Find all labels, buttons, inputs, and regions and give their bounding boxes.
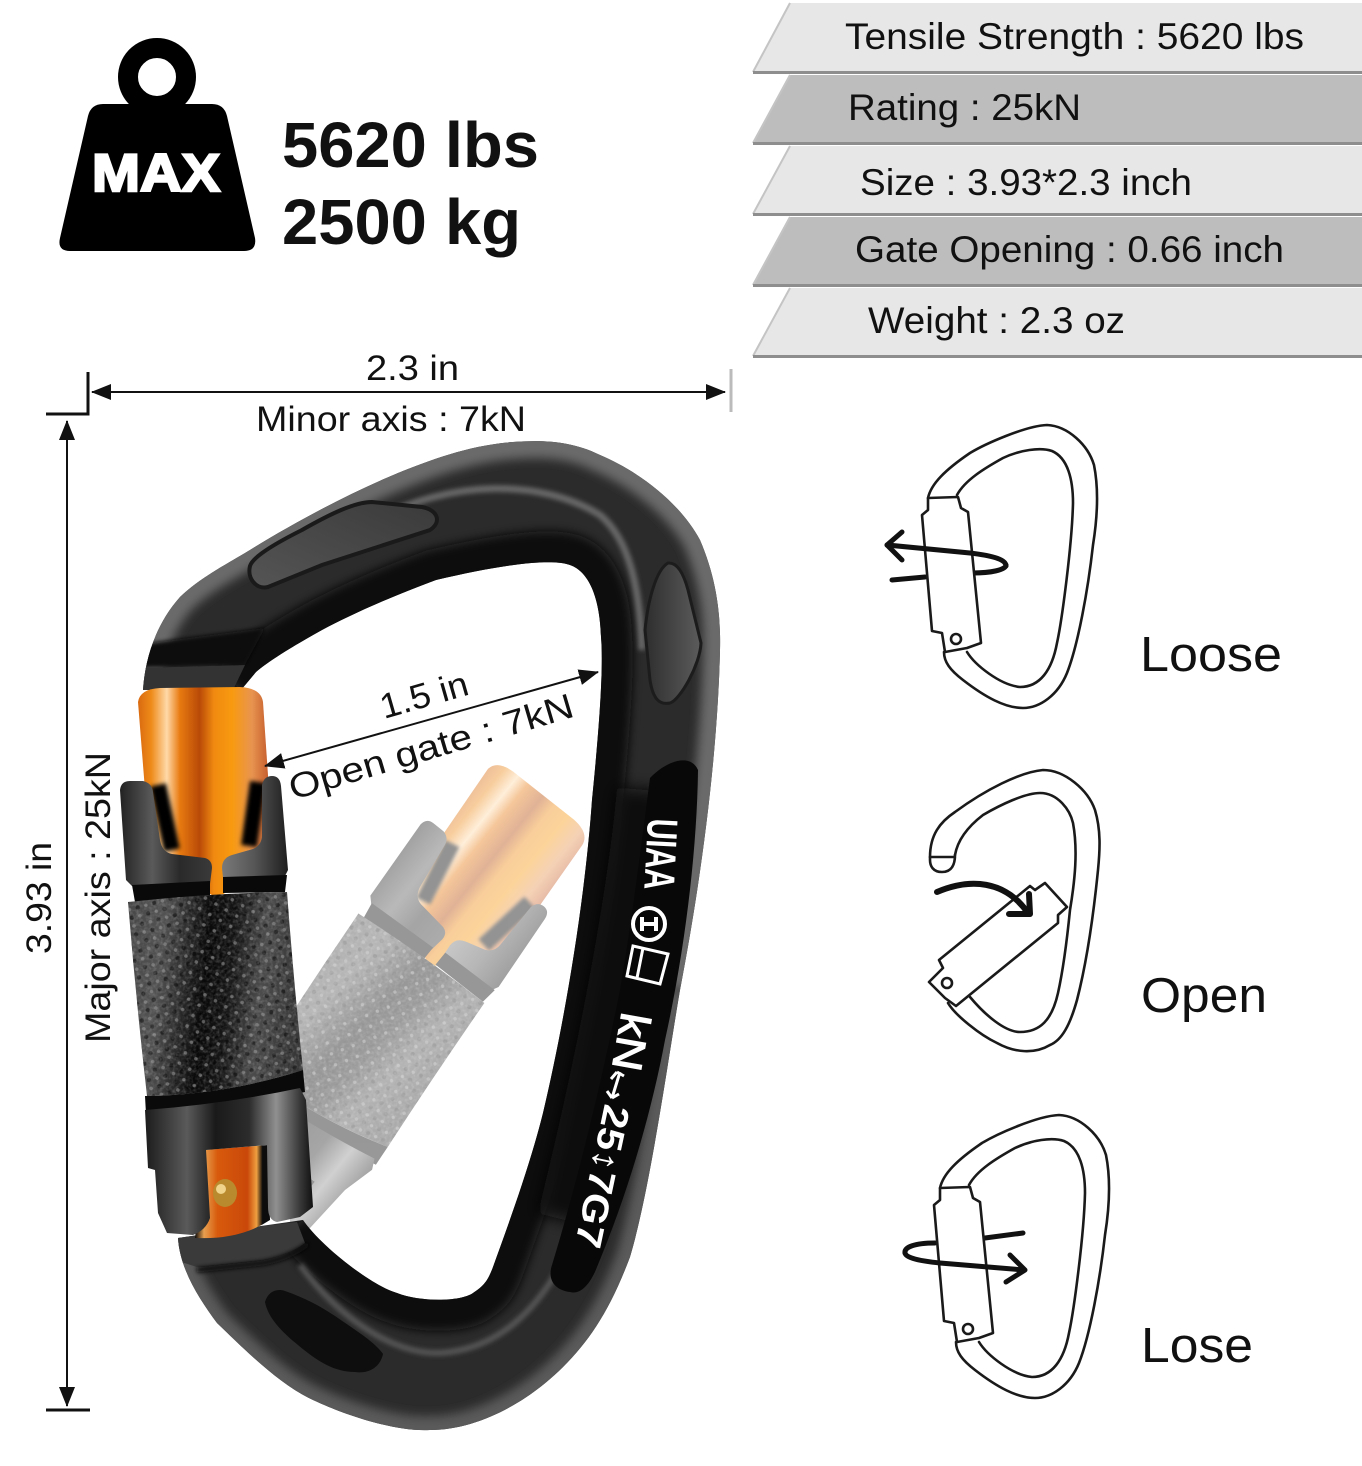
dimension: open gate width: Open gate : 7kN bbox=[284, 686, 578, 808]
icon: MAX weight: MAX bbox=[92, 144, 220, 203]
gate: knurled grip bbox=[128, 892, 303, 1096]
dimension: minor axis width: 2.3 in bbox=[366, 349, 459, 388]
body markings: UIAA bbox=[634, 817, 686, 891]
dimension: major axis height: 3.93 in bbox=[20, 842, 59, 954]
banner: weight bbox=[753, 288, 1362, 356]
lower ridge highlight bbox=[297, 1262, 554, 1358]
banner: weight: Weight : 2.3 oz bbox=[868, 300, 1125, 341]
banner: size bbox=[753, 146, 1362, 214]
panel: specification banners bbox=[753, 3, 1362, 356]
dimension: major axis height bbox=[20, 421, 118, 1410]
gate: upper sleeve bbox=[120, 776, 288, 902]
heading: max load bbox=[282, 109, 539, 258]
icon: loosen gate bbox=[887, 425, 1097, 708]
recess: top pad bbox=[249, 502, 437, 587]
carabiner illustration bbox=[120, 441, 720, 1430]
rim highlight bbox=[143, 441, 720, 990]
dimension: open gate width bbox=[265, 664, 598, 808]
upper seat band bbox=[135, 628, 265, 668]
label: open: Open bbox=[1141, 969, 1267, 1023]
recess: bottom pad bbox=[265, 1290, 383, 1372]
locking gate bbox=[120, 687, 313, 1238]
dimension: open gate width: 1.5 in bbox=[375, 664, 473, 727]
body markings: 25↕7G7 bbox=[567, 1101, 637, 1252]
icon: open gate bbox=[929, 770, 1100, 1051]
rotation arrow bbox=[905, 1253, 1025, 1282]
gate: rivet bbox=[213, 1179, 237, 1207]
body markings: kN bbox=[603, 1009, 659, 1075]
banner: tensile strength: Tensile Strength : 5620 lbs bbox=[845, 16, 1304, 57]
heading: max load: 2500 kg bbox=[282, 186, 521, 258]
banner: size: Size : 3.93*2.3 inch bbox=[860, 162, 1192, 203]
inner edge shadow bbox=[241, 562, 602, 1300]
label: loose: Loose bbox=[1140, 628, 1282, 682]
icon: lock gate bbox=[905, 1115, 1109, 1398]
dimension: minor axis width bbox=[46, 349, 731, 439]
gate: orange barrel bbox=[138, 687, 269, 895]
banner: gate opening: Gate Opening : 0.66 inch bbox=[855, 229, 1284, 270]
lower seat band bbox=[170, 1222, 305, 1267]
leg shadow bbox=[565, 790, 645, 1220]
carabiner body bbox=[135, 441, 720, 1430]
label: lose: Lose bbox=[1141, 1319, 1253, 1373]
banner: gate opening bbox=[753, 217, 1362, 286]
banner: rating: Rating : 25kN bbox=[848, 87, 1081, 128]
rotation arrow bbox=[887, 532, 1006, 566]
top ridge highlight bbox=[375, 489, 642, 650]
gate: lower sleeve bbox=[145, 1070, 313, 1238]
icon: MAX weight bbox=[59, 48, 255, 251]
body markings bbox=[567, 817, 686, 1252]
dimension: major axis height: Major axis : 25kN bbox=[79, 752, 118, 1043]
swing arrow bbox=[937, 884, 1030, 914]
recess: right pad bbox=[645, 563, 701, 703]
dimension: minor axis width: Minor axis : 7kN bbox=[256, 400, 526, 439]
marking slot bbox=[551, 760, 698, 1293]
banner: tensile strength bbox=[753, 3, 1362, 72]
ghost open gate bbox=[290, 765, 584, 1228]
banner: rating bbox=[753, 75, 1362, 144]
heading: max load: 5620 lbs bbox=[282, 109, 539, 181]
